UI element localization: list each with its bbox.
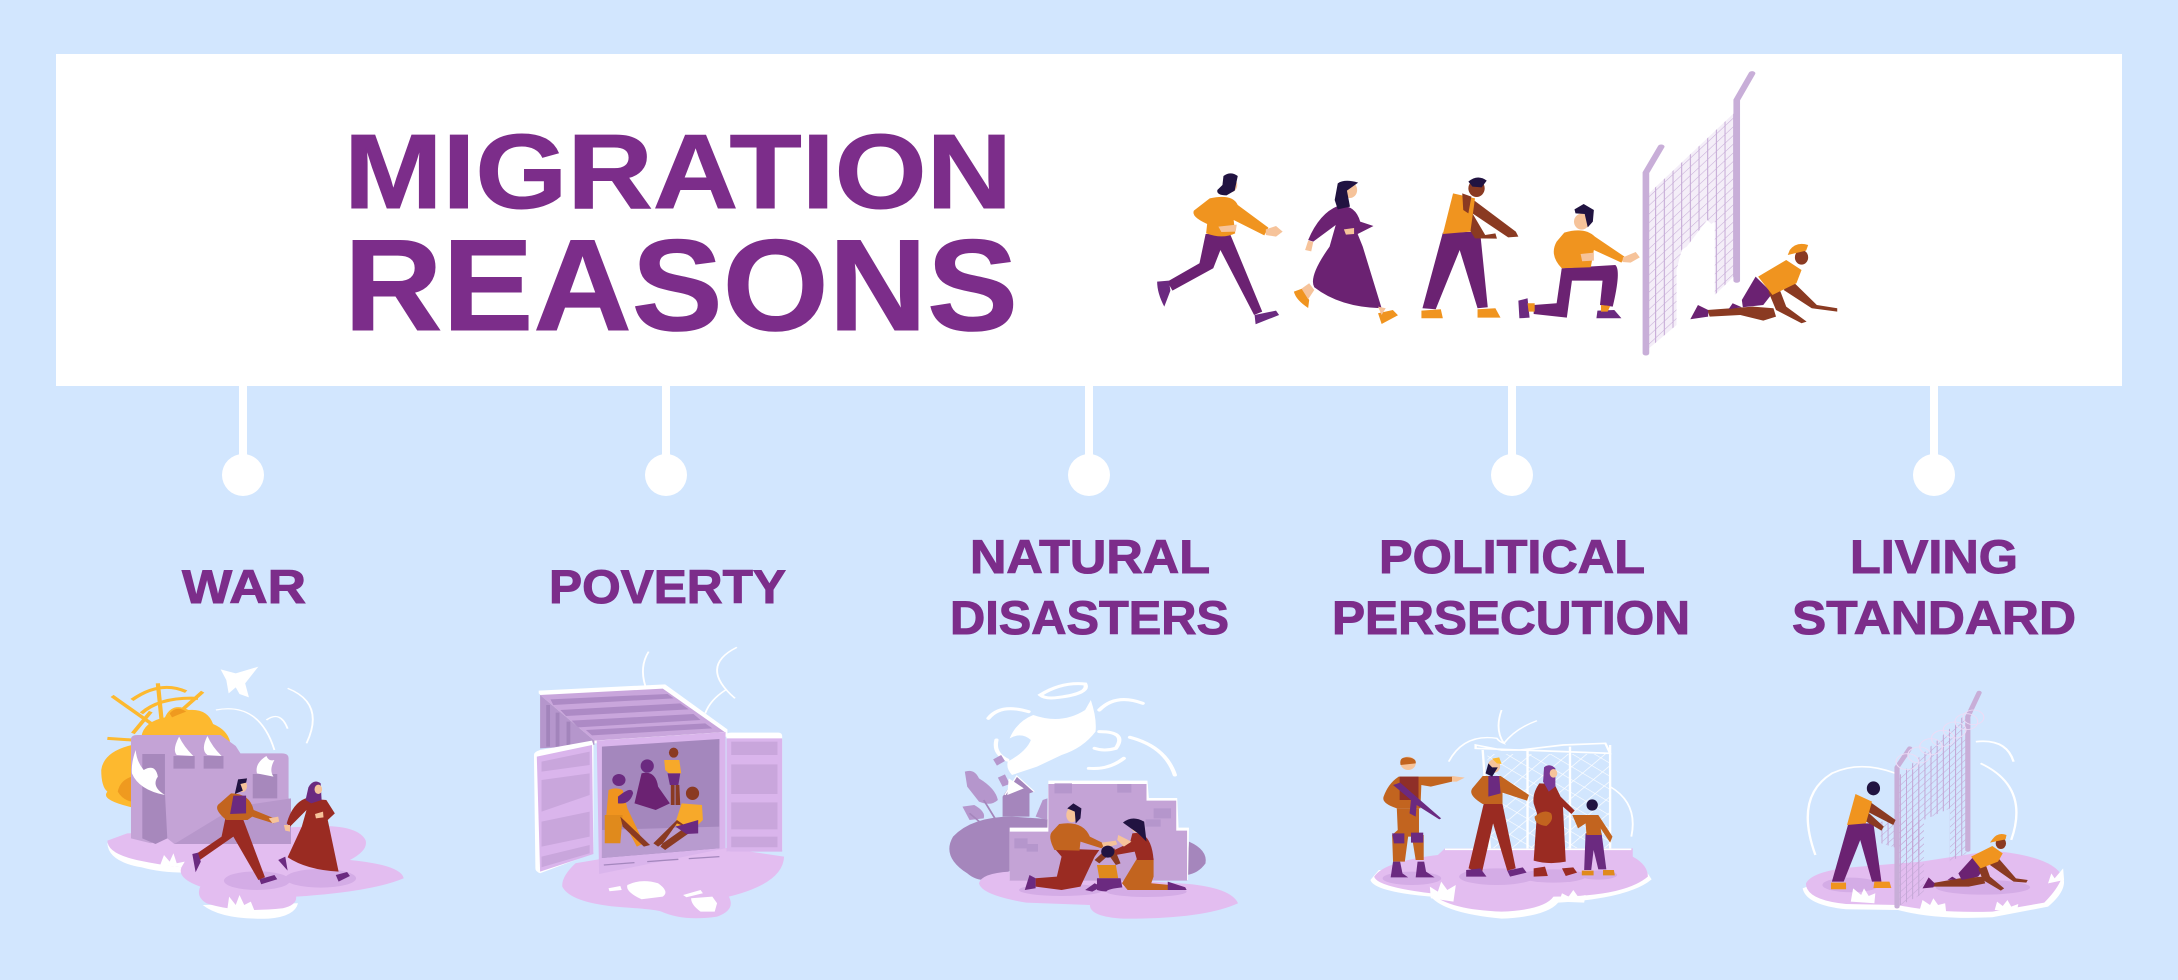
left door bbox=[534, 741, 593, 873]
illustration: people running to the fence bbox=[1157, 73, 1837, 353]
figure: woman running bbox=[278, 782, 350, 882]
heading: war: WAR bbox=[182, 560, 306, 613]
ground bbox=[562, 843, 784, 918]
grass bbox=[160, 853, 256, 913]
connector: natural disasters bbox=[1068, 386, 1110, 496]
heading: political persecution bbox=[1332, 530, 1690, 644]
illustration: poverty bbox=[534, 647, 784, 918]
wire fence bbox=[1879, 693, 1984, 907]
ruined building bbox=[131, 735, 291, 844]
ground bbox=[1370, 848, 1652, 919]
ground bbox=[107, 826, 404, 919]
debris and trees bbox=[962, 755, 1047, 820]
ground bbox=[979, 872, 1238, 919]
title: REASONS bbox=[344, 212, 1018, 358]
right door bbox=[727, 733, 782, 852]
heading: natural disasters: NATURAL bbox=[970, 530, 1210, 583]
figure: man in tank top bbox=[1421, 178, 1518, 318]
heading: natural disasters bbox=[950, 530, 1229, 644]
figure: man cutting fence bbox=[1831, 781, 1896, 889]
illustration: natural disasters bbox=[949, 684, 1238, 919]
heading: political persecution: POLITICAL bbox=[1379, 530, 1645, 583]
figure: child bbox=[1095, 846, 1123, 892]
banner panel bbox=[56, 54, 2122, 386]
figure: woman in long dress bbox=[1294, 181, 1398, 324]
figure: woman with bag bbox=[1533, 765, 1577, 877]
figure: soldier bbox=[1383, 757, 1465, 877]
people in container bbox=[605, 748, 703, 850]
grass bbox=[1851, 868, 2064, 912]
figure: kneeling man bbox=[1019, 803, 1117, 896]
icon: torn mesh fence bbox=[1646, 73, 1752, 353]
heading: living standard: LIVING bbox=[1850, 530, 2018, 583]
title: MIGRATION bbox=[344, 113, 1012, 231]
grass bbox=[1430, 882, 1586, 903]
heading: living standard bbox=[1792, 530, 2076, 644]
jet bbox=[221, 667, 258, 697]
shipping container bbox=[534, 684, 782, 874]
smoke curves bbox=[216, 688, 313, 750]
title bbox=[344, 113, 1018, 358]
figure: child bbox=[1572, 799, 1615, 875]
illustration: war bbox=[101, 667, 404, 919]
hill bbox=[949, 817, 1062, 880]
figure: man crawling bbox=[1923, 834, 2028, 891]
illustration: living standard bbox=[1803, 693, 2064, 918]
heading: poverty: POVERTY bbox=[549, 560, 786, 613]
connector: poverty bbox=[645, 386, 687, 496]
connector: political persecution bbox=[1491, 386, 1533, 496]
smoke curves bbox=[643, 647, 737, 713]
figure: bearded man bbox=[1466, 757, 1529, 877]
illustration: political persecution bbox=[1370, 710, 1652, 919]
explosion bbox=[101, 683, 230, 807]
connector: war bbox=[222, 386, 264, 496]
ruined wall bbox=[1010, 781, 1189, 881]
figure: bearded man running bbox=[1157, 173, 1283, 324]
house bbox=[1003, 776, 1034, 817]
figure: kneeling woman bbox=[1106, 819, 1187, 897]
connector: living standard bbox=[1913, 386, 1955, 496]
small bush bbox=[1187, 842, 1206, 875]
heading: living standard: STANDARD bbox=[1792, 591, 2076, 644]
white fence bbox=[1445, 710, 1633, 849]
figure: man crawling bbox=[1690, 244, 1837, 323]
heading: political persecution: PERSECUTION bbox=[1332, 591, 1690, 644]
heading: natural disasters: DISASTERS bbox=[950, 591, 1229, 644]
figure: man kneeling bbox=[1518, 204, 1640, 318]
ground bbox=[1803, 851, 2064, 918]
white arcs bbox=[1808, 741, 2016, 855]
tornado bbox=[988, 684, 1175, 775]
figure: man running bbox=[192, 778, 279, 884]
